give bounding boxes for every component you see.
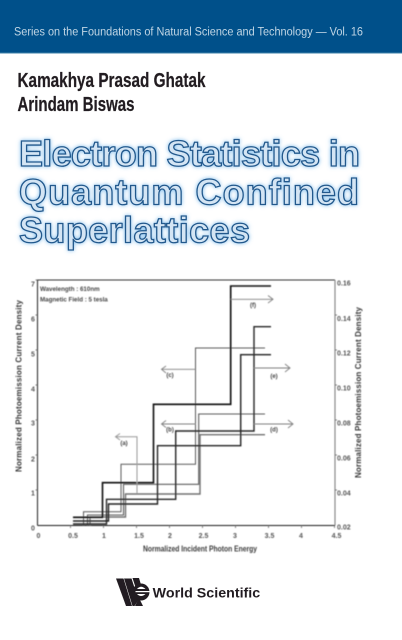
arrow f (231, 296, 273, 303)
left axis numbers: 7 (31, 282, 35, 288)
title: Quantum Confined (19, 172, 359, 212)
title: Electron Statistics in (19, 133, 360, 174)
right axis numbers: 0.08 (337, 420, 351, 428)
label a: (a) (120, 441, 128, 447)
chart annotation: Magnetic Field : 5 tesla (40, 296, 108, 304)
right axis numbers (337, 280, 351, 532)
curve e (73, 327, 271, 524)
chart annotation: Wavelength : 610nm (40, 286, 100, 293)
bottom axis numbers: 3 (233, 533, 237, 540)
arrow d (254, 420, 293, 428)
authors (18, 69, 206, 116)
label b: (b) (166, 428, 174, 434)
chart frame and axes (36, 280, 337, 528)
left axis numbers: 3 (31, 420, 35, 428)
series banner (0, 0, 402, 54)
publisher logo (116, 578, 261, 606)
arrow e (254, 364, 290, 372)
right axis numbers: 0.04 (337, 490, 351, 498)
left axis numbers: 6 (31, 316, 35, 324)
left axis numbers: 5 (31, 352, 35, 358)
publisher name: World Scientific (153, 586, 261, 600)
title (19, 133, 360, 250)
curve a (90, 435, 265, 526)
chart annotation (40, 286, 108, 304)
title: Superlattices (19, 210, 250, 250)
curve c (84, 348, 265, 526)
bottom axis numbers: 2 (168, 533, 172, 540)
right axis numbers: 0.10 (337, 386, 351, 392)
right axis numbers: 0.06 (337, 456, 351, 462)
bottom axis numbers: 1.5 (134, 533, 144, 540)
left axis numbers: 0 (31, 526, 35, 532)
right axis numbers: 0.16 (337, 280, 351, 288)
bottom axis numbers: 4 (299, 533, 303, 540)
bottom axis numbers: 0.5 (68, 533, 78, 540)
right axis numbers: 0.14 (337, 316, 351, 323)
right axis title: Normalized Photoemission Current Density (354, 306, 363, 478)
arrow a (116, 434, 137, 493)
label c: (c) (166, 373, 174, 379)
left axis numbers (31, 282, 35, 532)
authors: Arindam Biswas (18, 93, 134, 116)
left axis numbers: 2 (31, 456, 35, 464)
bottom axis numbers: 1 (102, 533, 106, 540)
arrow c (162, 366, 196, 373)
bottom axis numbers: 2.5 (199, 533, 208, 540)
bottom axis numbers (37, 533, 341, 540)
label f: (f) (250, 303, 256, 309)
bottom axis title: Normalized Incident Photon Energy (143, 544, 257, 554)
curve b (88, 414, 265, 526)
bottom axis numbers: 0 (37, 533, 41, 540)
left axis numbers: 4 (31, 386, 35, 394)
right axis numbers: 0.12 (337, 350, 351, 358)
left axis title: Normalized Photoemission Current Density (14, 299, 24, 472)
curve f (73, 286, 271, 517)
label e: (e) (270, 374, 278, 380)
authors: Kamakhya Prasad Ghatak (18, 69, 206, 92)
bottom axis numbers: 3.5 (265, 533, 274, 540)
left axis numbers: 1 (31, 490, 35, 498)
bottom axis numbers: 4.5 (332, 533, 341, 540)
icon: World Scientific mark (116, 578, 150, 606)
arrow b (162, 420, 196, 428)
chart (14, 280, 363, 554)
curve d (73, 355, 271, 521)
label d: (d) (270, 428, 278, 434)
series text: Series on the Foundations of Natural Science and Technology — Vol. 16 (14, 26, 363, 38)
right axis numbers: 0.02 (337, 524, 351, 532)
